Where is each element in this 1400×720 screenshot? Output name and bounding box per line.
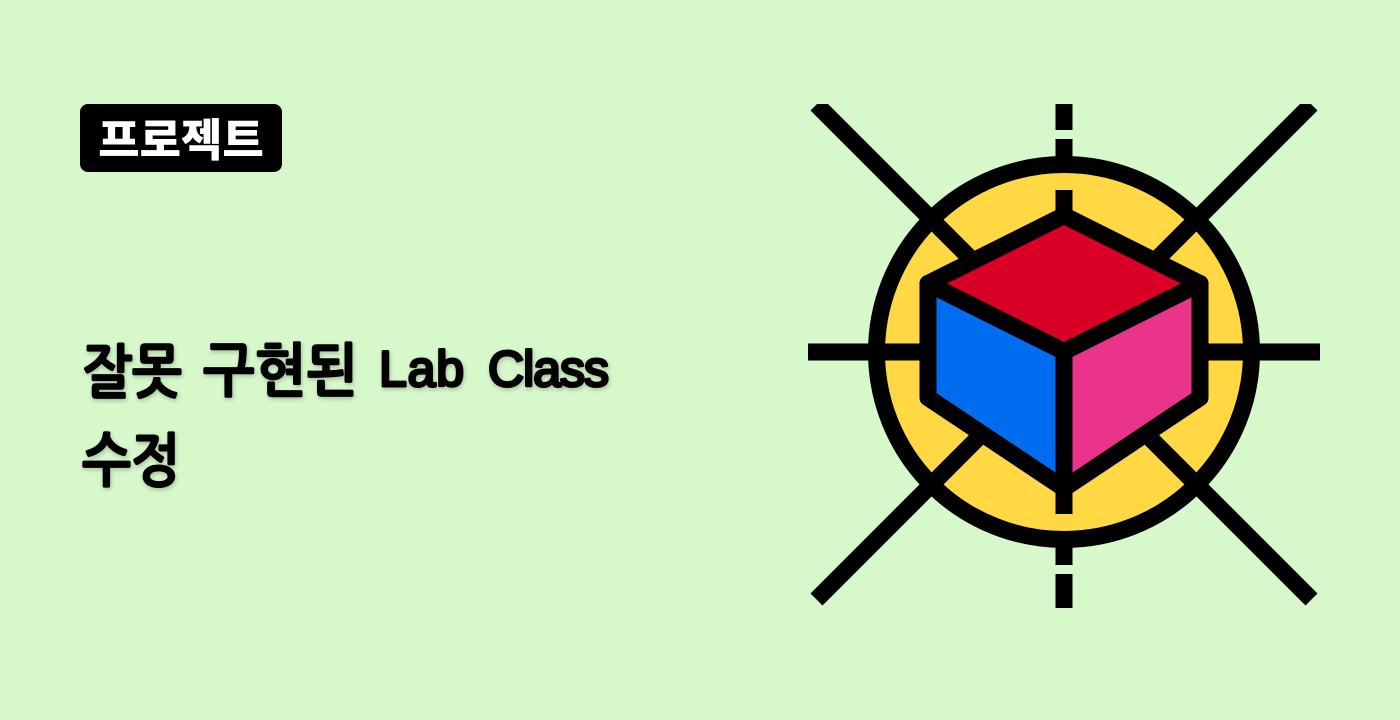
icon: cube [928,216,1200,488]
cube: blue face [928,284,1064,488]
title: 잘못 [82,343,182,401]
title: 구현된 [203,342,358,400]
title: 수정 [82,431,180,490]
icon: yellow circle [876,164,1252,540]
title [82,341,612,492]
title: Class [488,341,609,397]
title: Lab [379,341,464,397]
cube: pink face [1064,284,1200,488]
cube: red face [928,216,1200,352]
icon: rays [808,104,1320,608]
badge: project tag: 프로젝트 [98,104,264,169]
icon: cube in a target [808,104,1320,608]
